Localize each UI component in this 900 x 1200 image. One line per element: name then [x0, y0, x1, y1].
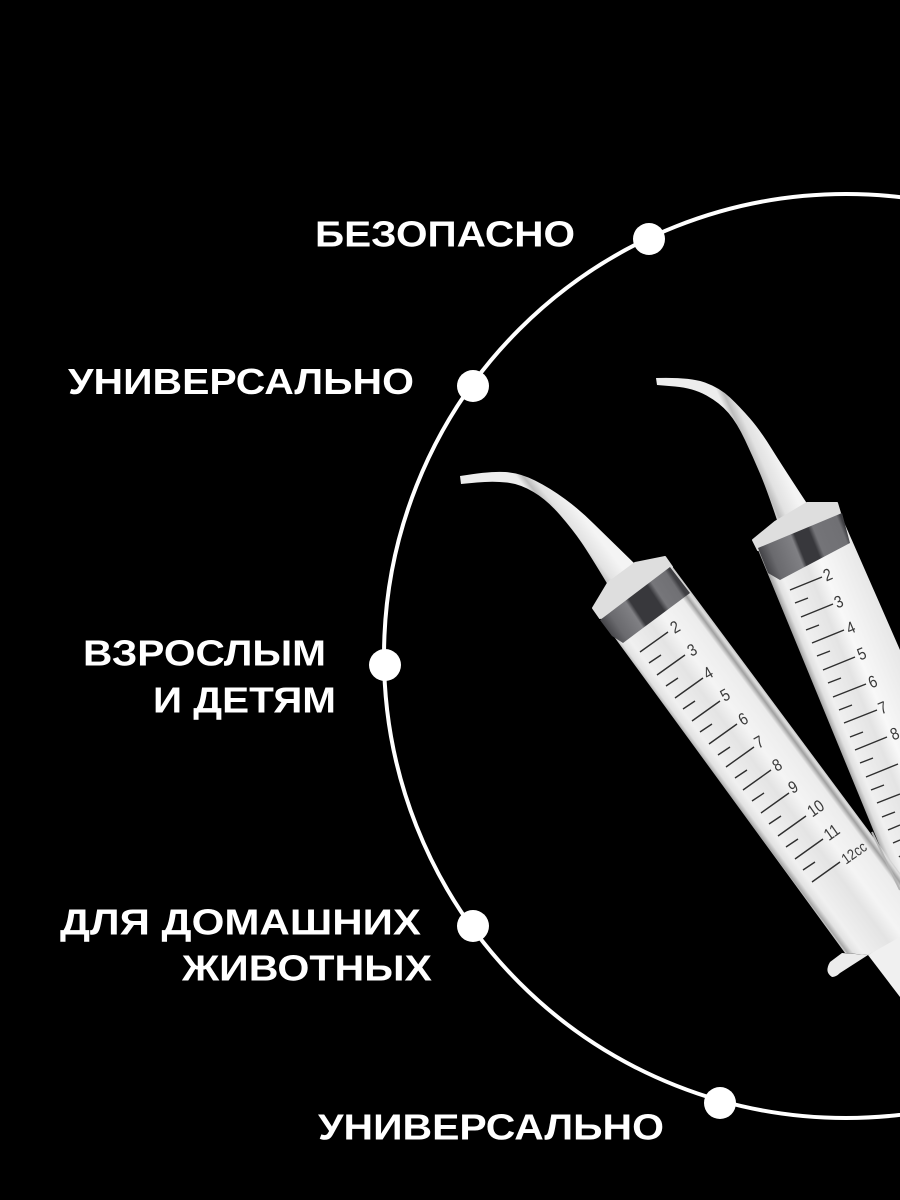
- scale numbers: back: 6: [866, 672, 881, 693]
- back syringe edge seen through: [872, 832, 900, 890]
- marker dot: 5: [704, 1087, 736, 1119]
- barrel: front: [596, 562, 900, 955]
- scale: front: [640, 632, 840, 882]
- syringe: front: [460, 472, 900, 997]
- scale numbers: front: 4: [701, 664, 717, 684]
- marker dot: 1: [633, 223, 665, 255]
- scale numbers: front: 3: [685, 641, 701, 661]
- gasket: front: [600, 567, 690, 643]
- label: safe: БЕЗОПАСНО: [315, 214, 575, 254]
- scale numbers: back: 2: [821, 566, 835, 586]
- circle outline: [384, 194, 900, 1118]
- scale numbers: back: 4: [844, 618, 859, 639]
- scale numbers: front: 5: [718, 686, 734, 706]
- flange: front: [827, 953, 868, 977]
- collar: front: [593, 557, 672, 618]
- syringe tip: back: [656, 378, 808, 520]
- scale numbers: front: 11: [821, 821, 844, 845]
- scale numbers: back: [821, 566, 900, 745]
- scale numbers: front: 9: [786, 778, 802, 798]
- marker dot: 2: [457, 370, 489, 402]
- label: adults and children: ВЗРОСЛЫМ: [83, 632, 326, 674]
- marker dot: 4: [457, 910, 489, 942]
- barrel: back: [758, 513, 900, 895]
- label: universal top: УНИВЕРСАЛЬНО: [68, 361, 414, 402]
- gasket: back: [758, 513, 850, 580]
- marker dot: 3: [369, 649, 401, 681]
- label: universal bottom: УНИВЕРСАЛЬНО: [318, 1106, 664, 1148]
- scale: back: [790, 577, 900, 857]
- syringe tip: front: [460, 472, 636, 585]
- label: for pets: ДЛЯ ДОМАШНИХ: [60, 902, 422, 942]
- collar: back: [753, 503, 840, 550]
- scale numbers: front: 7: [752, 733, 768, 753]
- label: adults and children: И ДЕТЯМ: [153, 680, 336, 720]
- scale numbers: front: 10: [804, 797, 828, 821]
- scale numbers: back: 7: [876, 699, 890, 719]
- label: for pets: [60, 902, 433, 988]
- scale numbers: front: 2: [668, 618, 684, 638]
- scale numbers: front: [668, 618, 870, 867]
- syringe: back: [656, 378, 900, 895]
- scale numbers: back: 3: [832, 592, 847, 613]
- scale numbers: front: 6: [736, 710, 752, 730]
- plunger: front: [868, 935, 900, 997]
- label: for pets: ЖИВОТНЫХ: [181, 948, 433, 988]
- scale numbers: back: 5: [855, 644, 870, 665]
- scale numbers: front: 8: [770, 756, 786, 776]
- label: adults and children: [83, 632, 336, 720]
- scale numbers: front: 12cc: [838, 838, 870, 867]
